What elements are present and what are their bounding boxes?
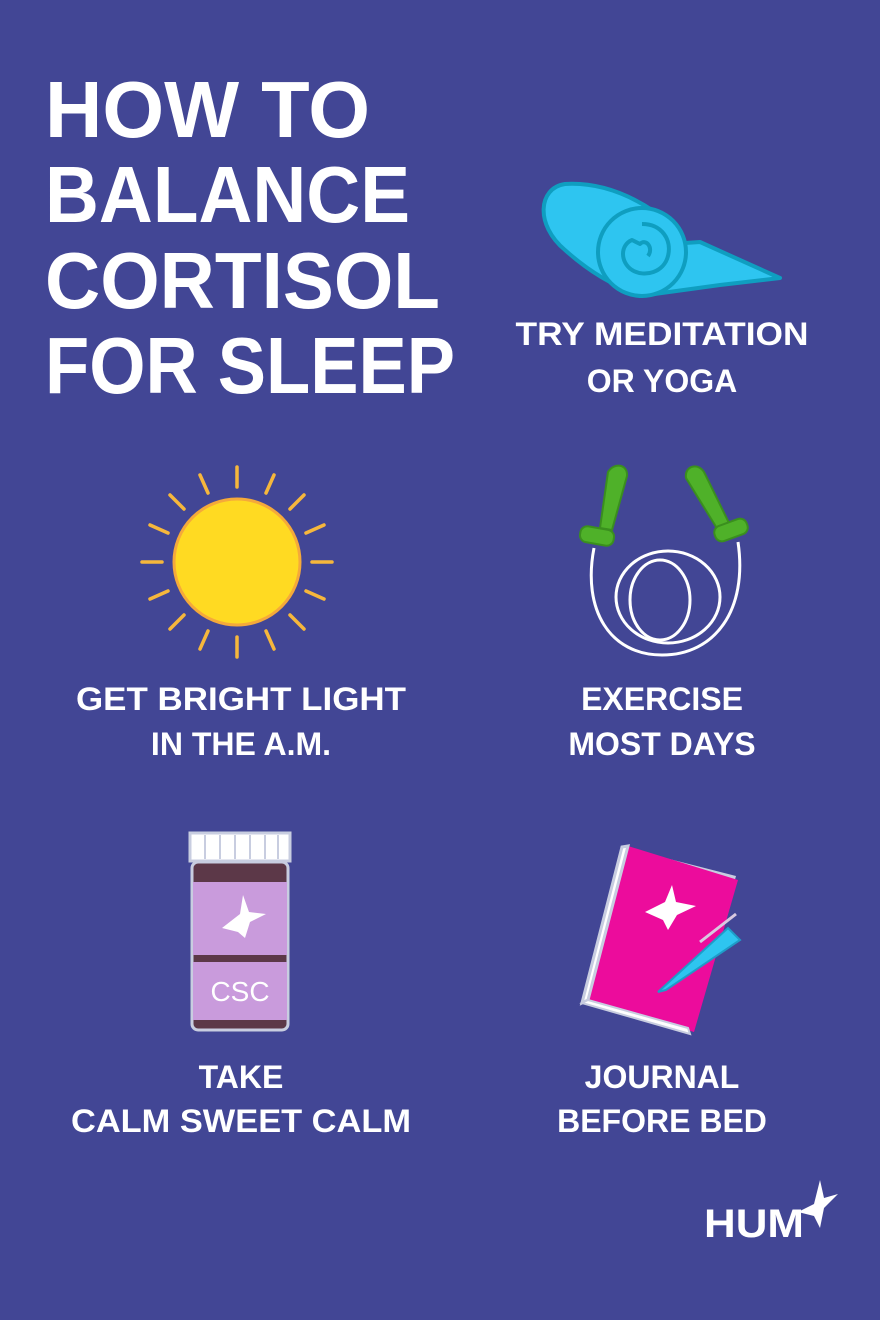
title: BALANCE: [45, 150, 410, 239]
label: calm sweet calm: TAKE: [199, 1059, 283, 1095]
title: [45, 65, 455, 410]
label: bright light: [76, 681, 406, 762]
label: meditation: TRY MEDITATION: [516, 316, 808, 352]
label: journal: [557, 1059, 767, 1139]
icon: jump rope: [579, 466, 750, 655]
title: HOW TO: [45, 65, 370, 154]
label: exercise: EXERCISE: [581, 681, 743, 717]
title: FOR SLEEP: [45, 321, 455, 410]
label: exercise: MOST DAYS: [568, 726, 756, 762]
label: calm sweet calm: [71, 1059, 411, 1139]
icon: supplement jar: [190, 833, 290, 1030]
logo: HUM: [704, 1180, 838, 1246]
label: exercise: [568, 681, 756, 762]
label: journal: JOURNAL: [585, 1059, 739, 1095]
label: bright light: GET BRIGHT LIGHT: [76, 681, 406, 717]
icon: journal: [582, 846, 740, 1034]
title: CORTISOL: [45, 236, 440, 325]
label: bright light: IN THE A.M.: [151, 726, 331, 762]
label: journal: BEFORE BED: [557, 1103, 767, 1139]
label: meditation: OR YOGA: [587, 363, 737, 399]
icon: supplement jar: CSC: [210, 976, 270, 1007]
icon: yoga mat: [544, 184, 780, 296]
label: calm sweet calm: CALM SWEET CALM: [71, 1103, 411, 1139]
icon: sun: [142, 467, 332, 657]
logo: HUM: HUM: [704, 1202, 804, 1246]
label: meditation: [516, 316, 808, 399]
